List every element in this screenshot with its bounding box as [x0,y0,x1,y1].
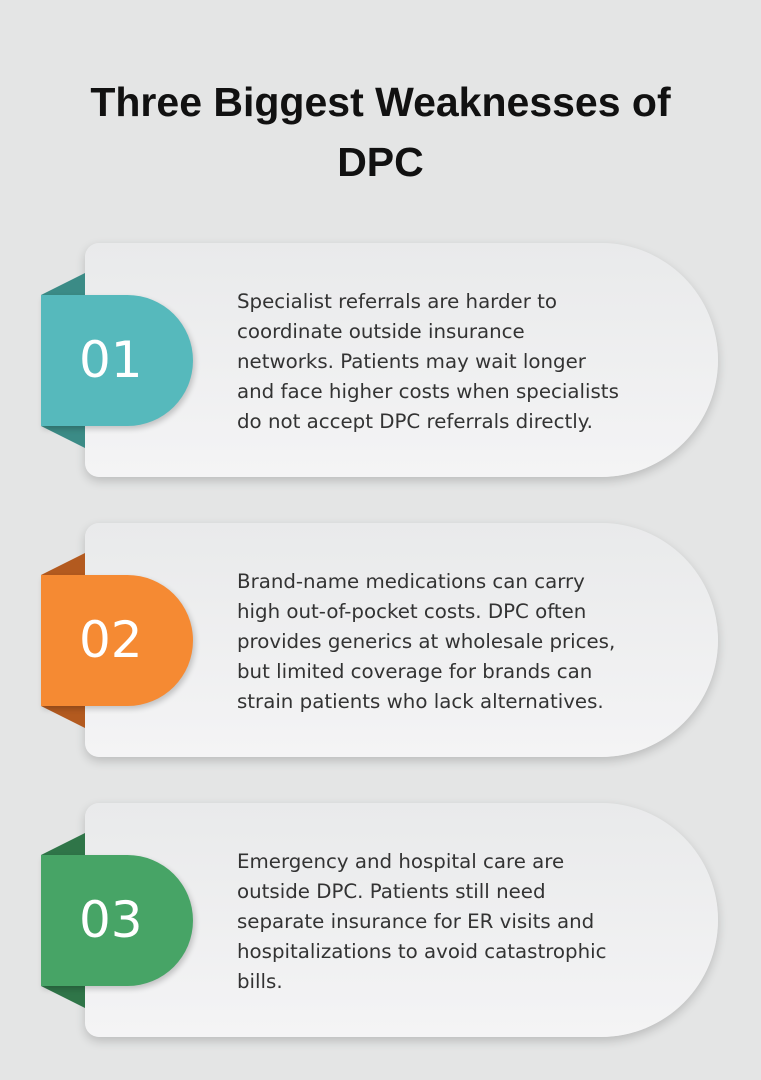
card 1 [85,243,718,477]
text 3: Emergency and hospital care are [237,850,564,873]
text 2 [237,570,615,713]
panel: item 3 [40,806,722,1045]
tab 03: 03 [79,891,143,949]
text 3 [237,850,606,993]
text 1: coordinate outside insurance [237,320,525,343]
text 1: networks. Patients may wait longer [237,350,586,373]
text 3: bills. [237,970,283,993]
title: Three Biggest Weaknesses of [90,79,671,125]
text 1: Specialist referrals are harder to [237,290,557,313]
text 2: Brand-name medications can carry [237,570,585,593]
text 3: hospitalizations to avoid catastrophic [237,940,606,963]
title: DPC [337,139,424,185]
tab 02 [41,575,193,706]
card 2 [85,523,718,757]
text 2: strain patients who lack alternatives. [237,690,604,713]
card 3 [85,803,718,1037]
fold 2 [41,553,85,728]
text 2: but limited coverage for brands can [237,660,592,683]
fold 1 [41,273,85,448]
fold 3 [41,833,85,1008]
text 2: provides generics at wholesale prices, [237,630,615,653]
tab 01 [41,295,193,426]
text 2: high out-of-pocket costs. DPC often [237,600,586,623]
text 1 [237,290,619,433]
text 1: and face higher costs when specialists [237,380,619,403]
tab 02: 02 [79,611,143,669]
text 3: separate insurance for ER visits and [237,910,594,933]
panel: item 2 [40,526,722,765]
text 3: outside DPC. Patients still need [237,880,546,903]
tab 01: 01 [79,331,143,389]
panel: item 1 [40,246,722,485]
title [90,79,671,185]
tab 03 [41,855,193,986]
text 1: do not accept DPC referrals directly. [237,410,593,433]
